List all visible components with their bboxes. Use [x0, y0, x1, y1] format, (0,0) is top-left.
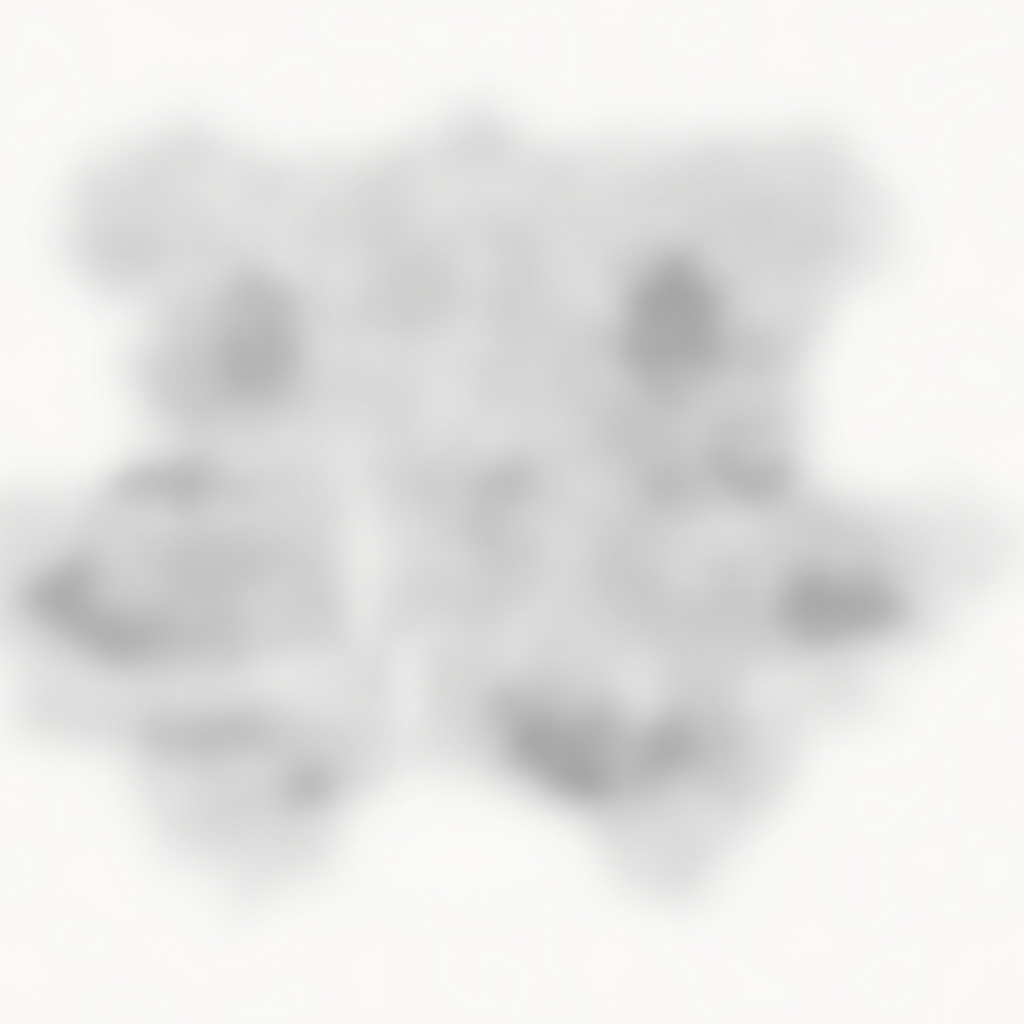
overall silhouette: [0, 105, 1020, 905]
dark patches, right side: [415, 255, 905, 795]
dark patches, left side: [25, 278, 332, 813]
pale streaks: [125, 428, 835, 745]
central bottom clearing: [365, 815, 565, 905]
broad mid-grey mass: [30, 190, 900, 800]
